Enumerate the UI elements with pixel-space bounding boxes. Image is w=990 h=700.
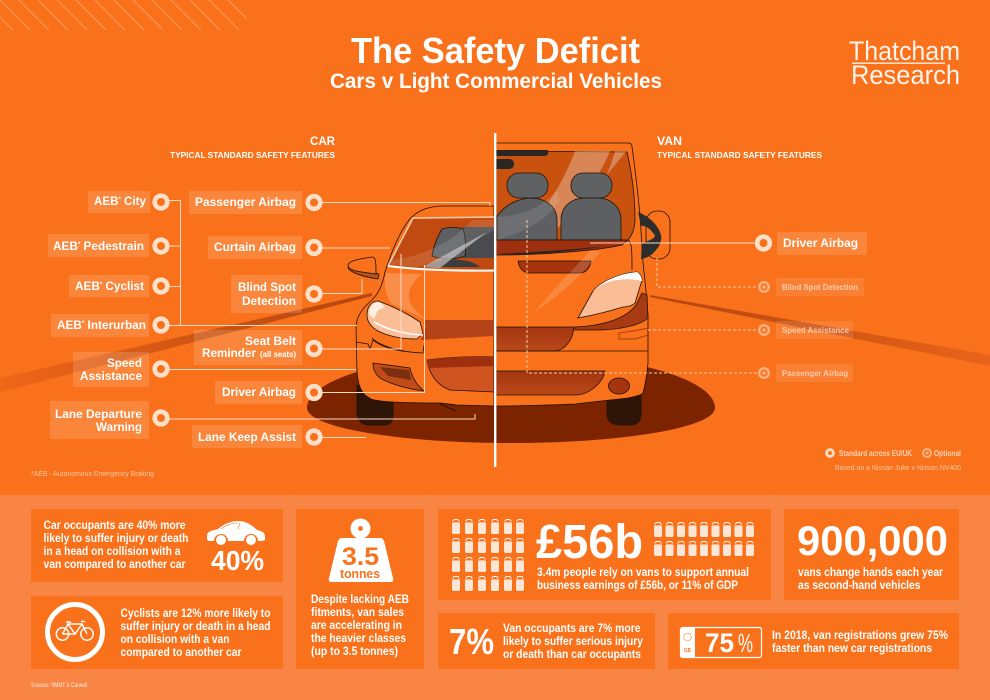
car wheel <box>357 385 393 425</box>
label: AEB Cyclist: AEB <box>75 279 100 293</box>
panel: car occupants 40%: van compared to another car <box>44 559 186 571</box>
heading: car <box>170 134 335 160</box>
label: Blind Spot Detection (van optional): Blind Spot Detection <box>782 282 858 292</box>
car seat <box>425 227 494 267</box>
icon: weight: 3.5 <box>342 543 379 571</box>
legend: Standard across EU/UK <box>839 449 912 458</box>
label: Curtain Airbag: Curtain Airbag <box>214 240 296 254</box>
car bumper lines <box>356 338 424 353</box>
legend: Based on a Nissan Juke v Nissan NV400 <box>835 463 961 472</box>
label: Passenger Airbag: Passenger Airbag <box>195 195 296 209</box>
label: Passenger Airbag <box>189 191 320 214</box>
label: AEB Cyclist: Cyclist <box>102 279 144 293</box>
label: Lane Keep Assist <box>192 425 320 448</box>
label: Lane Keep Assist: Lane Keep Assist <box>198 430 296 444</box>
label: AEB Pedestrain: AEB <box>53 239 78 253</box>
logo: Thatcham Research: Research <box>851 60 960 90</box>
title <box>330 30 662 93</box>
label: Driver Airbag (car): Driver Airbag <box>222 385 296 399</box>
van fog lamp <box>608 378 630 394</box>
car mirror <box>348 257 379 279</box>
car grille upper <box>420 320 494 340</box>
logo: Thatcham Research <box>849 36 960 90</box>
panel: 7%: Van occupants are 7% more <box>503 623 640 635</box>
van mirror <box>638 211 670 259</box>
car windscreen <box>388 218 494 270</box>
panel: £56b: £56b <box>536 516 643 569</box>
heading: van: VAN <box>657 134 682 148</box>
van red trim <box>575 293 648 330</box>
panel: car occupants 40%: 40% <box>211 545 264 576</box>
van handle <box>518 261 591 273</box>
icon grid: vans right <box>654 522 754 556</box>
ground shadow <box>307 353 715 443</box>
label: Seat Belt Reminder <box>194 330 320 365</box>
panel: cyclists 12% <box>31 596 283 669</box>
label: AEB City: City <box>121 194 146 208</box>
icon: number plate: % <box>738 628 753 658</box>
label: AEB Pedestrain: Pedestrain <box>80 239 144 253</box>
panel: 7%: likely to suffer serious injury <box>503 636 644 648</box>
van indicator <box>619 328 648 339</box>
panel: £56b: business earnings of £56b, or 11% of GDP <box>537 580 738 592</box>
label: AEB Cyclist <box>69 275 167 297</box>
connector lines <box>168 200 757 438</box>
bonnet highlight <box>385 273 425 319</box>
rear-view mirror <box>496 159 514 169</box>
icon: bicycle in circle <box>48 604 102 660</box>
panel: 3.5 tonnes: (up to 3.5 tonnes) <box>311 646 398 658</box>
label: Seat Belt Reminder: (all seats) <box>260 350 296 359</box>
windscreen glare <box>545 151 626 230</box>
car body <box>356 206 494 406</box>
panel: cyclists 12%: compared to another car <box>120 647 242 659</box>
label: AEB Interurban <box>51 314 167 337</box>
panel: 7%: or death than car occupants <box>503 649 641 661</box>
car headlight <box>367 301 423 339</box>
label: Seat Belt Reminder: Reminder <box>202 346 256 360</box>
car lower grille <box>427 357 494 392</box>
van windscreen <box>496 151 635 240</box>
icon: car <box>207 521 265 545</box>
icon grid: vans left <box>452 519 524 591</box>
heading: van: TYPICAL STANDARD SAFETY FEATURES <box>657 150 822 160</box>
panel: 3.5 tonnes: are accelerating in <box>311 620 402 632</box>
label: Speed Assistance (van optional): Speed Assistance <box>782 325 849 335</box>
panel: car occupants 40%: likely to suffer injury or death <box>44 533 188 545</box>
car fog lamp <box>373 363 424 391</box>
label: AEB City <box>88 191 167 213</box>
bumper line <box>496 350 648 352</box>
label: Speed Assistance: Assistance <box>80 369 142 383</box>
label: Blind Spot Detection: Blind Spot <box>238 280 296 294</box>
icon: weight: tonnes <box>340 567 380 581</box>
label: Driver Airbag (car) <box>215 381 320 404</box>
label: Speed Assistance <box>73 352 167 387</box>
panel: car occupants 40%: in a head on collision with a <box>44 546 181 558</box>
label: AEB Pedestrain <box>48 234 167 257</box>
panel: cyclists 12%: on collision with a van <box>120 634 230 646</box>
panel: £56b: 3.4m people rely on vans to support annual <box>537 567 749 579</box>
legend: Optional <box>934 449 961 458</box>
label: AEB Interurban: Interurban <box>84 318 146 332</box>
heading: van <box>657 134 822 160</box>
subtitle: Cars v Light Commercial Vehicles <box>330 70 662 93</box>
windscreen glare <box>391 220 494 267</box>
illustration: car front <box>348 206 494 425</box>
panel: 7% <box>438 613 655 669</box>
panel: cyclists 12%: suffer injury or death in a head <box>120 621 270 633</box>
panel: 3.5 tonnes: fitments, van sales <box>311 607 404 619</box>
icon: number plate <box>680 627 762 658</box>
dashboard <box>496 240 628 255</box>
panel: 900,000: 900,000 <box>797 517 948 564</box>
title: The Safety Deficit <box>351 30 640 71</box>
footnote: AEB: *AEB - Autonomous Emergency Braking <box>31 469 154 478</box>
bonnet glare <box>535 251 600 312</box>
panel: cyclists 12%: Cyclists are 12% more likely to <box>120 608 270 620</box>
label: AEB City: AEB <box>94 194 119 208</box>
windscreen frame <box>388 217 494 266</box>
label: Driver Airbag (van) <box>757 232 867 255</box>
panel: car occupants 40%: Car occupants are 40% more <box>44 520 186 532</box>
label: Passenger Airbag (van optional): Passenger Airbag <box>782 368 848 378</box>
label: Lane Departure Warning: Lane Departure <box>55 407 142 421</box>
footnote: sources: Sources: SMMT & Carwell <box>31 683 87 689</box>
label: Lane Departure Warning <box>50 401 167 439</box>
van wheel <box>607 392 641 425</box>
panel: 75%: faster than new car registrations <box>772 643 932 655</box>
illustration: van front <box>496 143 670 425</box>
panel: 900,000: vans change hands each year <box>798 567 943 579</box>
icon: weight <box>329 518 393 582</box>
panel: 75%: In 2018, van registrations grew 75% <box>772 630 948 642</box>
heading: car: CAR <box>310 134 335 148</box>
seat glare <box>497 190 560 240</box>
label: Passenger Airbag (van optional) <box>758 364 853 382</box>
divider between car and van <box>494 133 496 467</box>
panel: £56b <box>438 509 771 600</box>
panel: 3.5 tonnes: Despite lacking AEB <box>311 594 409 606</box>
road stripe right <box>650 295 990 366</box>
label: Seat Belt Reminder: Seat Belt <box>245 334 296 348</box>
van lower grille <box>496 371 605 395</box>
panel: 900,000: as second-hand vehicles <box>798 580 920 592</box>
legend <box>827 448 961 472</box>
label: AEB Pedestrain: * <box>78 242 81 248</box>
logo: Thatcham Research: Thatcham <box>849 36 960 66</box>
label: Blind Spot Detection (van optional) <box>758 278 864 296</box>
label: Driver Airbag (van): Driver Airbag <box>783 236 858 250</box>
panel: 75% <box>668 613 959 669</box>
label: Blind Spot Detection <box>231 275 320 313</box>
panel: car occupants 40% <box>31 509 283 582</box>
van headlight <box>578 272 642 318</box>
road stripe left <box>0 293 372 392</box>
seat right <box>561 173 621 240</box>
wiper highlight <box>423 232 487 268</box>
label: Curtain Airbag <box>208 236 320 259</box>
icon: number plate: GB <box>684 648 691 654</box>
seat left <box>497 173 557 240</box>
label: AEB Interurban: AEB <box>57 318 82 332</box>
sun visor <box>496 150 548 156</box>
label: AEB Cyclist: * <box>100 282 103 288</box>
label: Blind Spot Detection: Detection <box>242 294 296 308</box>
panel: 900,000 <box>784 509 959 600</box>
panel: 3.5 tonnes: the heavier classes <box>311 633 406 645</box>
label: AEB Interurban: * <box>82 321 85 327</box>
van upper grille <box>496 327 574 351</box>
icon: number plate: 75 <box>705 628 734 658</box>
label: Speed Assistance: Speed <box>107 356 142 370</box>
label: AEB City: * <box>119 197 121 203</box>
label: Speed Assistance (van optional) <box>758 321 853 339</box>
bonnet line <box>628 240 632 270</box>
van body <box>496 143 648 406</box>
panel: 3.5 tonnes <box>296 509 424 669</box>
label: Lane Departure Warning: Warning <box>96 420 142 434</box>
heading: car: TYPICAL STANDARD SAFETY FEATURES <box>170 150 335 160</box>
bottom band <box>0 495 990 700</box>
wipers <box>500 246 606 255</box>
panel: 7%: 7% <box>449 621 494 662</box>
